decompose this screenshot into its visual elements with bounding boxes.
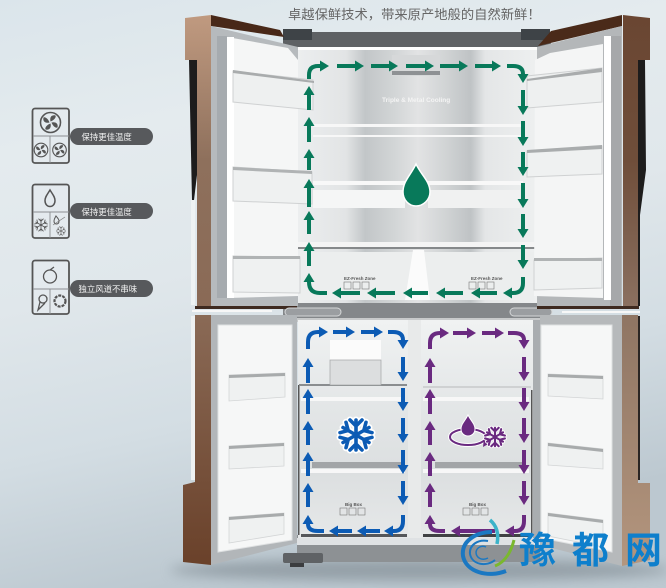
drawer label right: EZ-Fresh Zone — [471, 276, 503, 281]
cabinet back — [283, 32, 551, 48]
top fixture — [392, 55, 440, 76]
arrows: blue airflow — [308, 332, 403, 531]
feature: separate airflow: 独立风道不串味 — [78, 284, 138, 294]
feature list — [32, 108, 153, 314]
foot — [283, 553, 323, 567]
logo swirl — [463, 520, 514, 574]
drawer label: Big Box — [345, 502, 362, 507]
drawer label: Big Box — [469, 502, 486, 507]
crisper drawers — [300, 252, 413, 300]
feature: temperature — [32, 108, 153, 163]
icon: green water drop — [403, 164, 430, 206]
door: lower left — [183, 315, 297, 565]
shelves — [313, 124, 523, 137]
feature: humidity — [32, 184, 153, 238]
door bins — [527, 68, 602, 108]
door: upper left — [185, 15, 314, 306]
panel: left freezer — [298, 320, 408, 538]
watermark logo — [463, 520, 666, 574]
feature: temperature: 保持更佳温度 — [82, 132, 132, 142]
icon: purple drop with cycle and snowflake — [450, 415, 505, 447]
door bins — [233, 71, 313, 110]
door: upper right — [527, 15, 650, 306]
door: lower right — [540, 315, 650, 566]
drawer label left: EZ-Fresh Zone — [344, 276, 376, 281]
brand text: Triple & Metal Cooling — [382, 97, 450, 104]
panel: fridge interior — [298, 47, 538, 303]
title: 卓越保鲜技术，带来原产地般的自然新鲜！ — [288, 6, 541, 22]
door bins — [548, 374, 603, 399]
hinges — [192, 306, 640, 316]
feature: humidity: 保持更佳温度 — [82, 207, 132, 217]
door bins — [229, 373, 285, 401]
arrows: purple airflow — [430, 333, 524, 531]
icon: blue snowflake — [340, 420, 372, 450]
panel: right freezer — [421, 320, 533, 538]
floor shadow — [170, 559, 666, 581]
ice box — [330, 340, 381, 360]
handle strips — [191, 200, 195, 305]
refrigerator — [183, 15, 650, 567]
arrows: green airflow — [309, 66, 523, 293]
feature: separate airflow — [32, 260, 153, 314]
